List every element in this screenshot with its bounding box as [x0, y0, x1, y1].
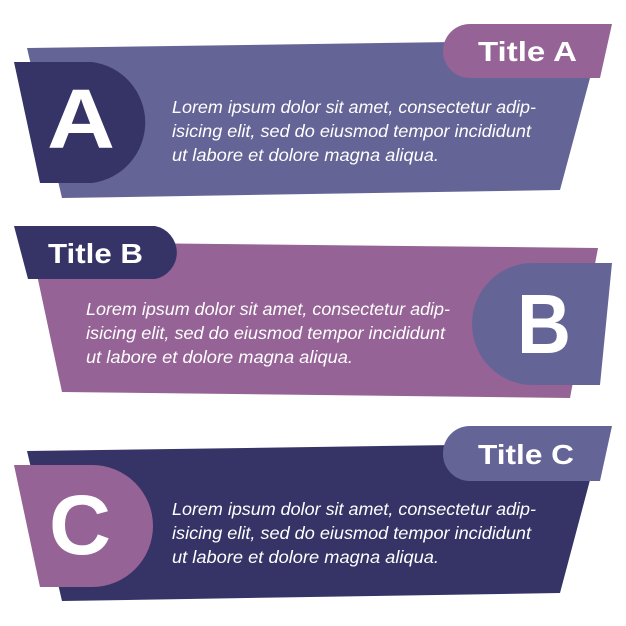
letter badge B	[472, 263, 612, 385]
title tab C	[443, 426, 612, 481]
letter badge C: C	[49, 478, 111, 572]
text B: isicing elit, sed do eiusmod tempor incididunt	[86, 323, 446, 343]
text A: ut labore et dolore magna aliqua.	[172, 145, 439, 165]
title tab C: Title C	[478, 439, 574, 470]
text A: isicing elit, sed do eiusmod tempor incididunt	[172, 121, 532, 141]
text B: ut labore et dolore magna aliqua.	[86, 347, 353, 367]
title tab A: Title A	[478, 36, 577, 67]
letter badge B: B	[517, 277, 571, 371]
letter badge A: A	[47, 72, 115, 166]
letter badge A	[14, 62, 145, 183]
text A	[172, 97, 536, 165]
panel C body	[27, 443, 600, 601]
panel A	[14, 24, 612, 198]
panel C	[14, 426, 612, 601]
text C: ut labore et dolore magna aliqua.	[172, 547, 439, 567]
panel B body	[30, 242, 598, 398]
title tab A	[443, 24, 612, 78]
panel A body	[27, 40, 600, 198]
text C: Lorem ipsum dolor sit amet, consectetur adip-	[172, 499, 536, 519]
title tab B	[14, 226, 177, 279]
text A: Lorem ipsum dolor sit amet, consectetur adip-	[172, 97, 536, 117]
text C: isicing elit, sed do eiusmod tempor incididunt	[172, 523, 532, 543]
text C	[172, 499, 536, 567]
text B	[86, 299, 450, 367]
panel B	[14, 226, 612, 398]
letter badge C	[14, 465, 153, 587]
text B: Lorem ipsum dolor sit amet, consectetur adip-	[86, 299, 450, 319]
title tab B: Title B	[48, 238, 143, 269]
